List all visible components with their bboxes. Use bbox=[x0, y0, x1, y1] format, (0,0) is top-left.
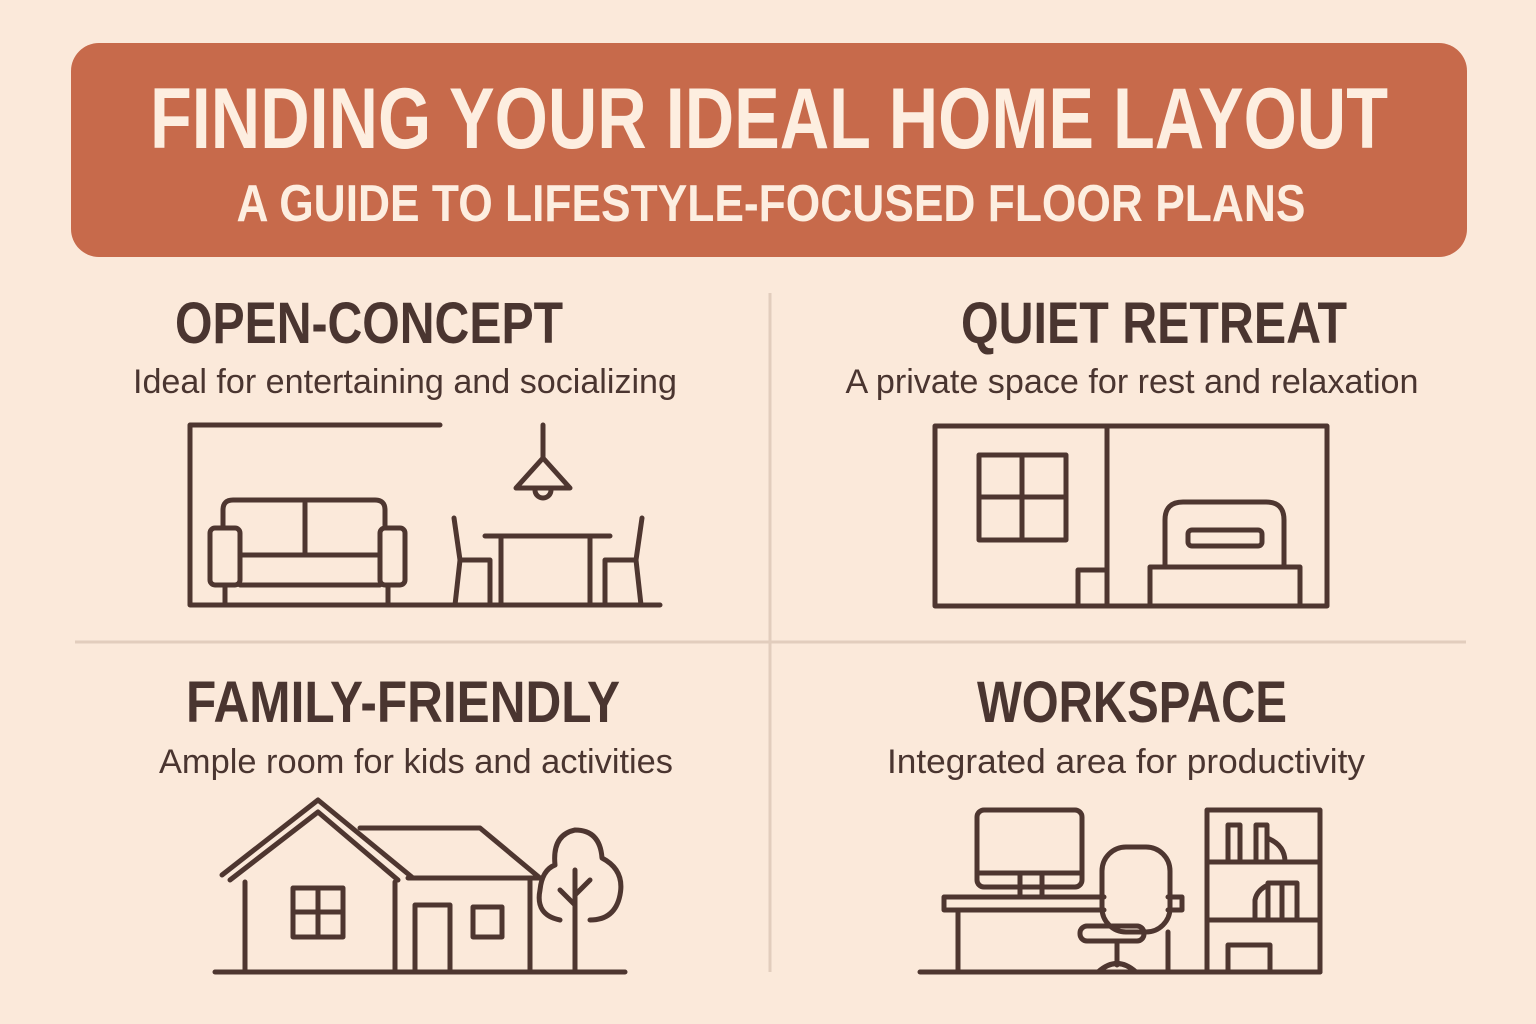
description: family-friendly: Ample room for kids and activities bbox=[159, 743, 673, 781]
heading: family-friendly: FAMILY-FRIENDLY bbox=[186, 670, 620, 735]
header banner bbox=[71, 43, 1467, 257]
icon: living and dining room bbox=[190, 425, 660, 605]
panel: open-concept bbox=[133, 291, 677, 605]
heading: open-concept: OPEN-CONCEPT bbox=[175, 291, 563, 356]
icon: bedroom bbox=[935, 426, 1327, 606]
heading: workspace: WORKSPACE bbox=[977, 670, 1287, 735]
description: quiet retreat: A private space for rest and relaxation bbox=[846, 363, 1418, 401]
description: workspace: Integrated area for productivity bbox=[887, 743, 1365, 781]
panel: quiet retreat bbox=[846, 291, 1418, 606]
icon: desk, computer and bookcase bbox=[920, 810, 1320, 972]
panel: workspace bbox=[887, 670, 1365, 972]
heading: quiet retreat: QUIET RETREAT bbox=[961, 291, 1347, 356]
panel: family-friendly bbox=[159, 670, 673, 972]
icon: house with tree bbox=[215, 800, 625, 972]
description: open-concept: Ideal for entertaining and socializing bbox=[133, 363, 677, 401]
subtitle: A GUIDE TO LIFESTYLE-FOCUSED FLOOR PLANS bbox=[236, 175, 1306, 233]
